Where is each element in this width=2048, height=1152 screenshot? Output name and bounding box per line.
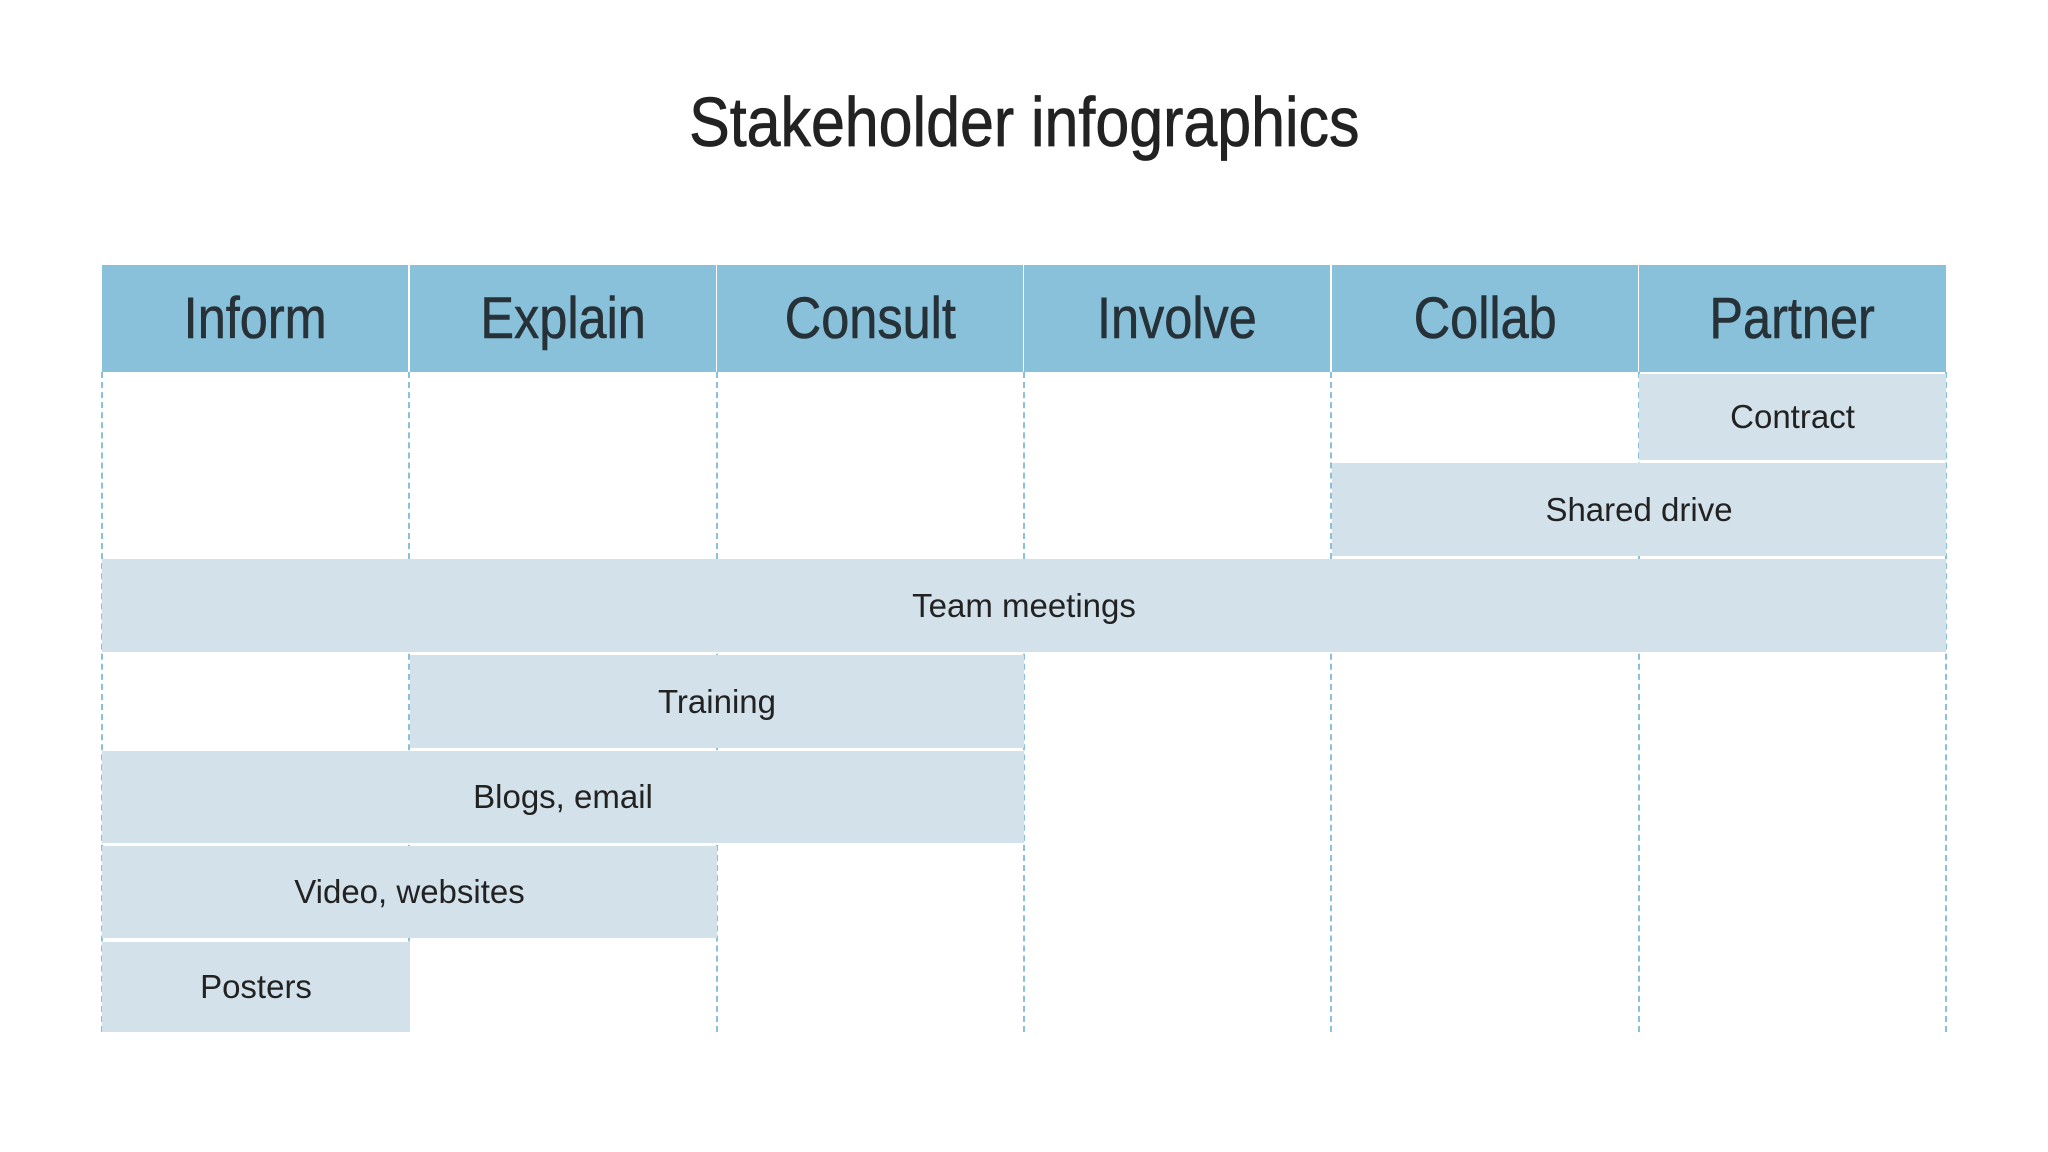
- bars: [102, 374, 1946, 1032]
- title: Stakeholder infographics: [689, 83, 1359, 161]
- bar: Posters: Posters: [200, 968, 312, 1005]
- bar: Team meetings: [102, 559, 1946, 652]
- bar: Blogs, email: [102, 751, 1024, 843]
- bar: Video, websites: [102, 846, 717, 938]
- header row: [102, 265, 1946, 372]
- bar: Blogs, email: Blogs, email: [473, 778, 653, 815]
- header: Explain: Explain: [480, 286, 646, 351]
- header: Collab: Collab: [1413, 286, 1557, 351]
- header: Collab: [1332, 265, 1638, 372]
- bar: Contract: [1639, 374, 1946, 460]
- bar: Shared drive: Shared drive: [1545, 490, 1733, 528]
- dashed column lines: [101, 372, 1947, 1032]
- header: Consult: Consult: [784, 286, 956, 351]
- header: Explain: [410, 265, 716, 372]
- bar: Training: [410, 655, 1024, 748]
- header: Involve: Involve: [1097, 286, 1257, 351]
- bar: Shared drive: [1332, 463, 1946, 556]
- header: Consult: [717, 265, 1023, 372]
- header: Inform: [102, 265, 408, 372]
- bar: Training: Training: [658, 682, 776, 720]
- bar: Video, websites: Video, websites: [294, 873, 525, 910]
- header: Partner: [1639, 265, 1946, 372]
- header: Inform: Inform: [183, 286, 327, 351]
- header: Partner: Partner: [1710, 286, 1875, 351]
- bar: Team meetings: Team meetings: [912, 586, 1136, 624]
- bar: Posters: [102, 942, 410, 1032]
- header: Involve: [1024, 265, 1330, 372]
- bar: Contract: Contract: [1730, 398, 1855, 435]
